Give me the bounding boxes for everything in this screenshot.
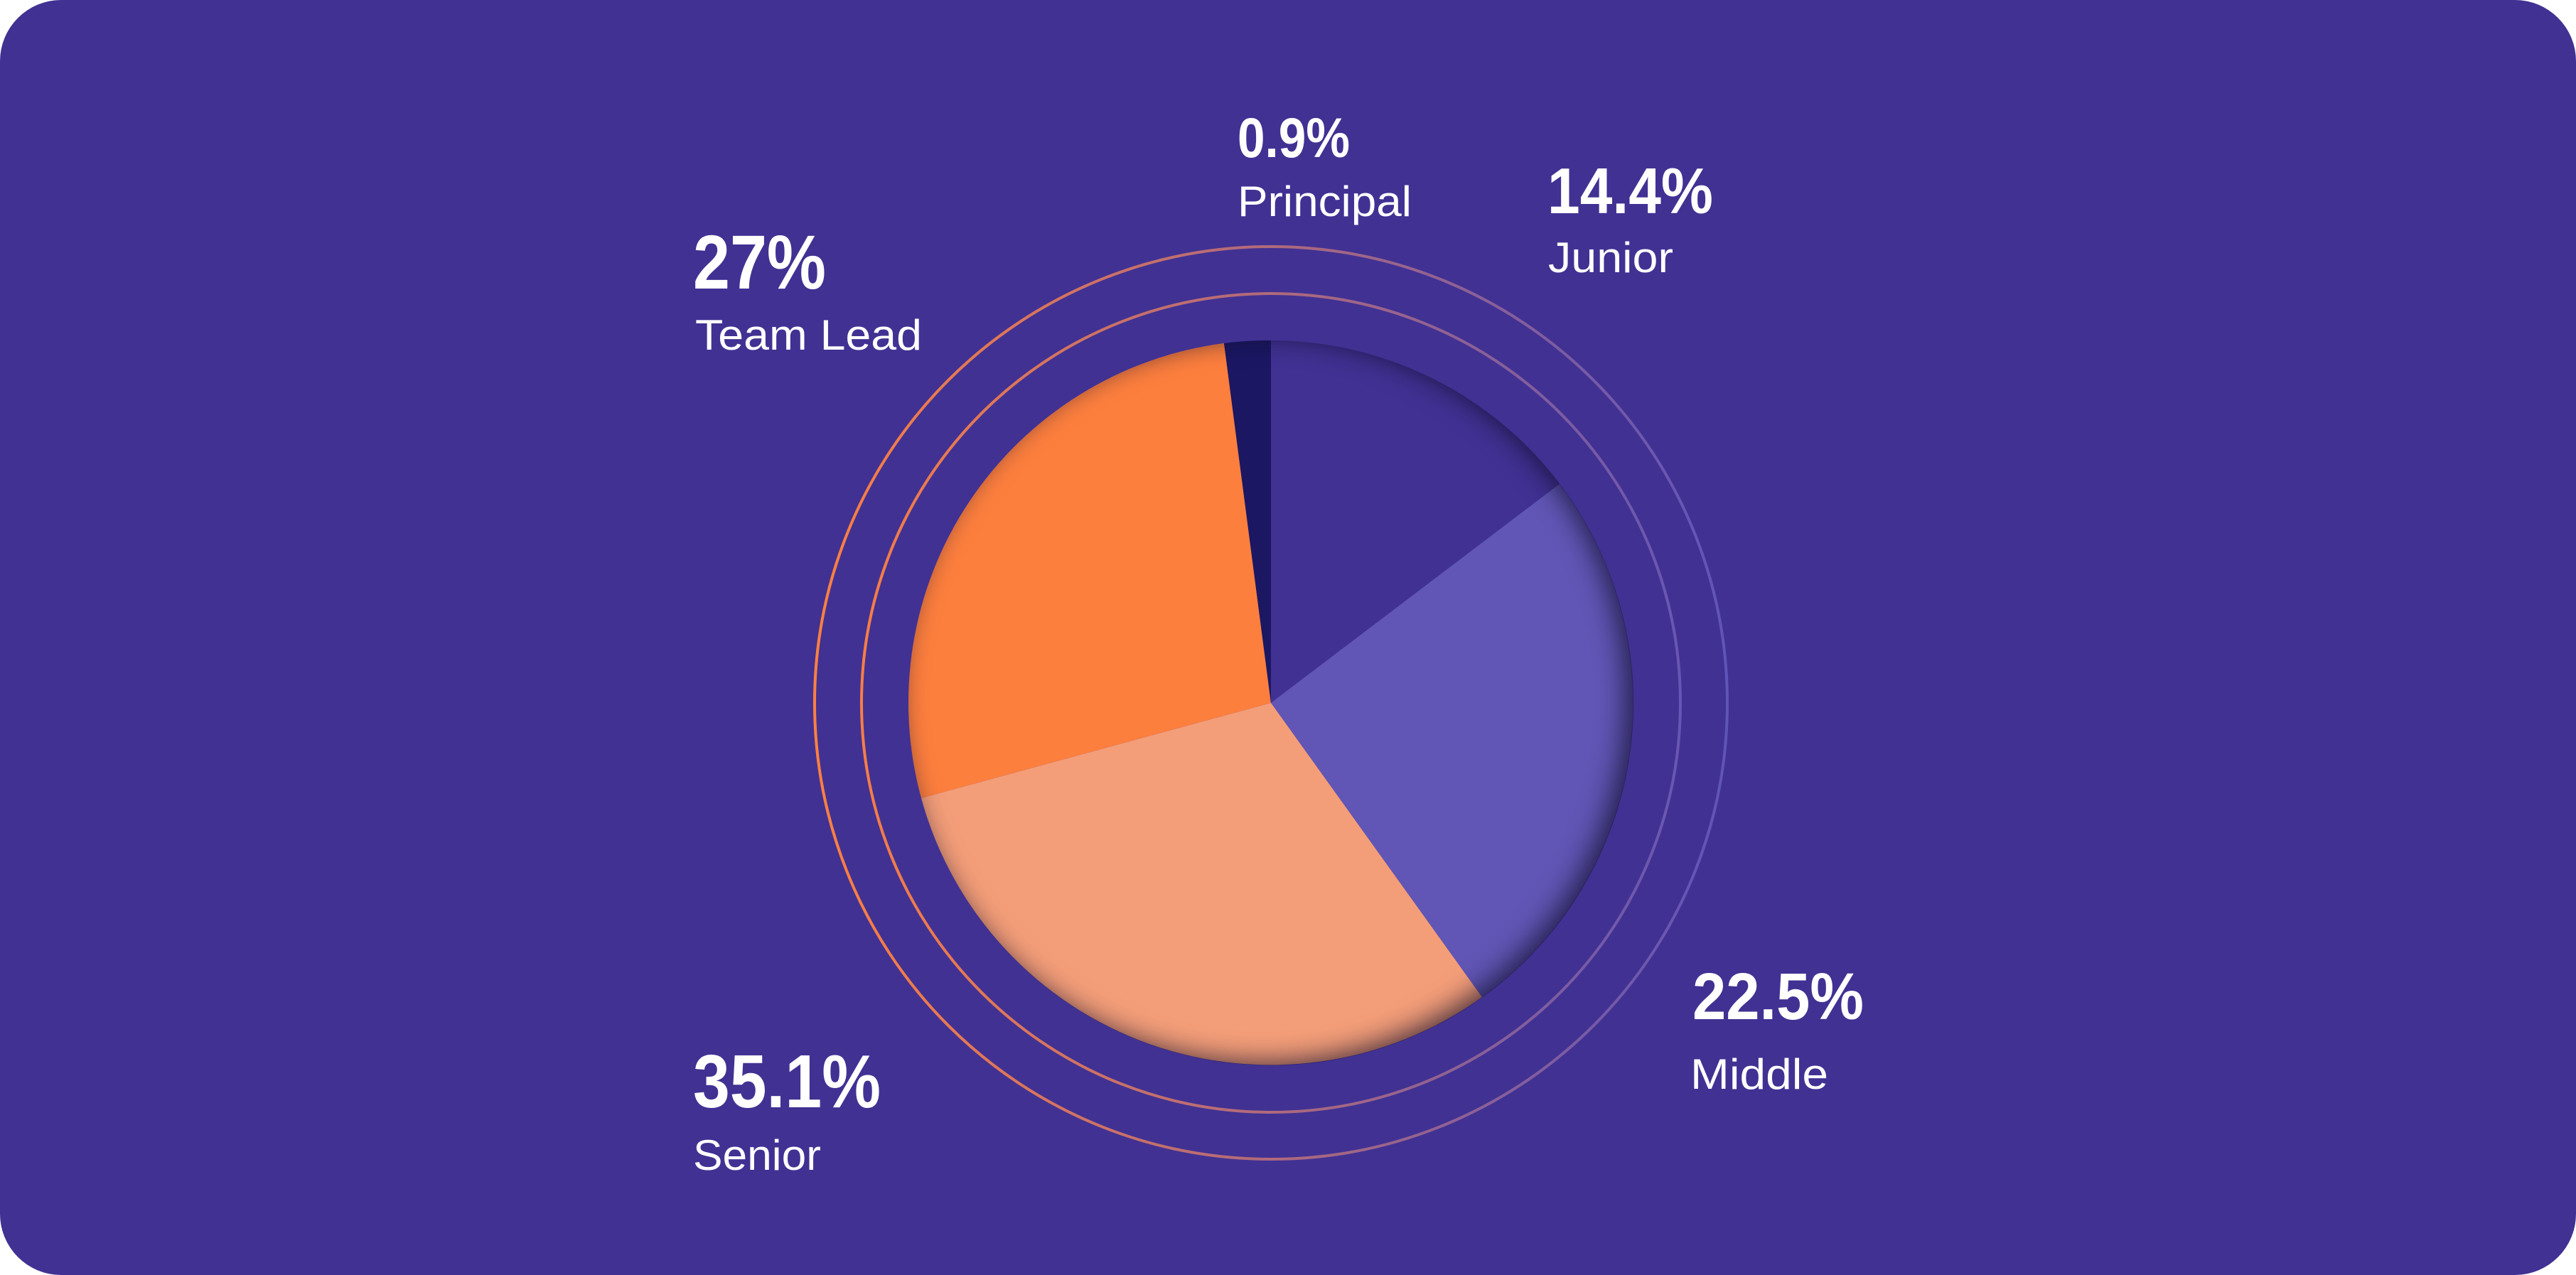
label: Team Lead: Team Lead bbox=[695, 311, 922, 359]
inner ring bbox=[862, 294, 1680, 1112]
label: Principal: Principal bbox=[1238, 178, 1412, 225]
pie chart bbox=[908, 340, 1633, 1065]
slice: Junior 14.4% bbox=[1271, 340, 1560, 703]
slice: Team Lead 27% bbox=[908, 343, 1271, 798]
pie inner shadow bbox=[908, 340, 1633, 1065]
outer ring bbox=[815, 247, 1727, 1159]
label: Junior: Junior bbox=[1548, 234, 1673, 281]
slice: Middle 22.5% bbox=[1271, 484, 1633, 997]
slice: Senior 35.1% bbox=[921, 703, 1482, 1065]
label: Junior bbox=[1547, 156, 1713, 281]
label: Team Lead: 27% bbox=[693, 219, 826, 305]
label: Middle: 22.5% bbox=[1692, 959, 1864, 1033]
label: Senior bbox=[693, 1040, 881, 1179]
label: Senior: Senior bbox=[693, 1131, 821, 1179]
label: Team Lead bbox=[693, 219, 922, 359]
label: Principal: 0.9% bbox=[1238, 106, 1350, 169]
slice: Principal 0.9% bbox=[1224, 340, 1271, 703]
label: Junior: 14.4% bbox=[1547, 156, 1713, 227]
label: Middle: Middle bbox=[1690, 1050, 1828, 1098]
label: Senior: 35.1% bbox=[693, 1040, 881, 1124]
label: Principal bbox=[1238, 106, 1412, 225]
label: Middle bbox=[1690, 959, 1864, 1098]
